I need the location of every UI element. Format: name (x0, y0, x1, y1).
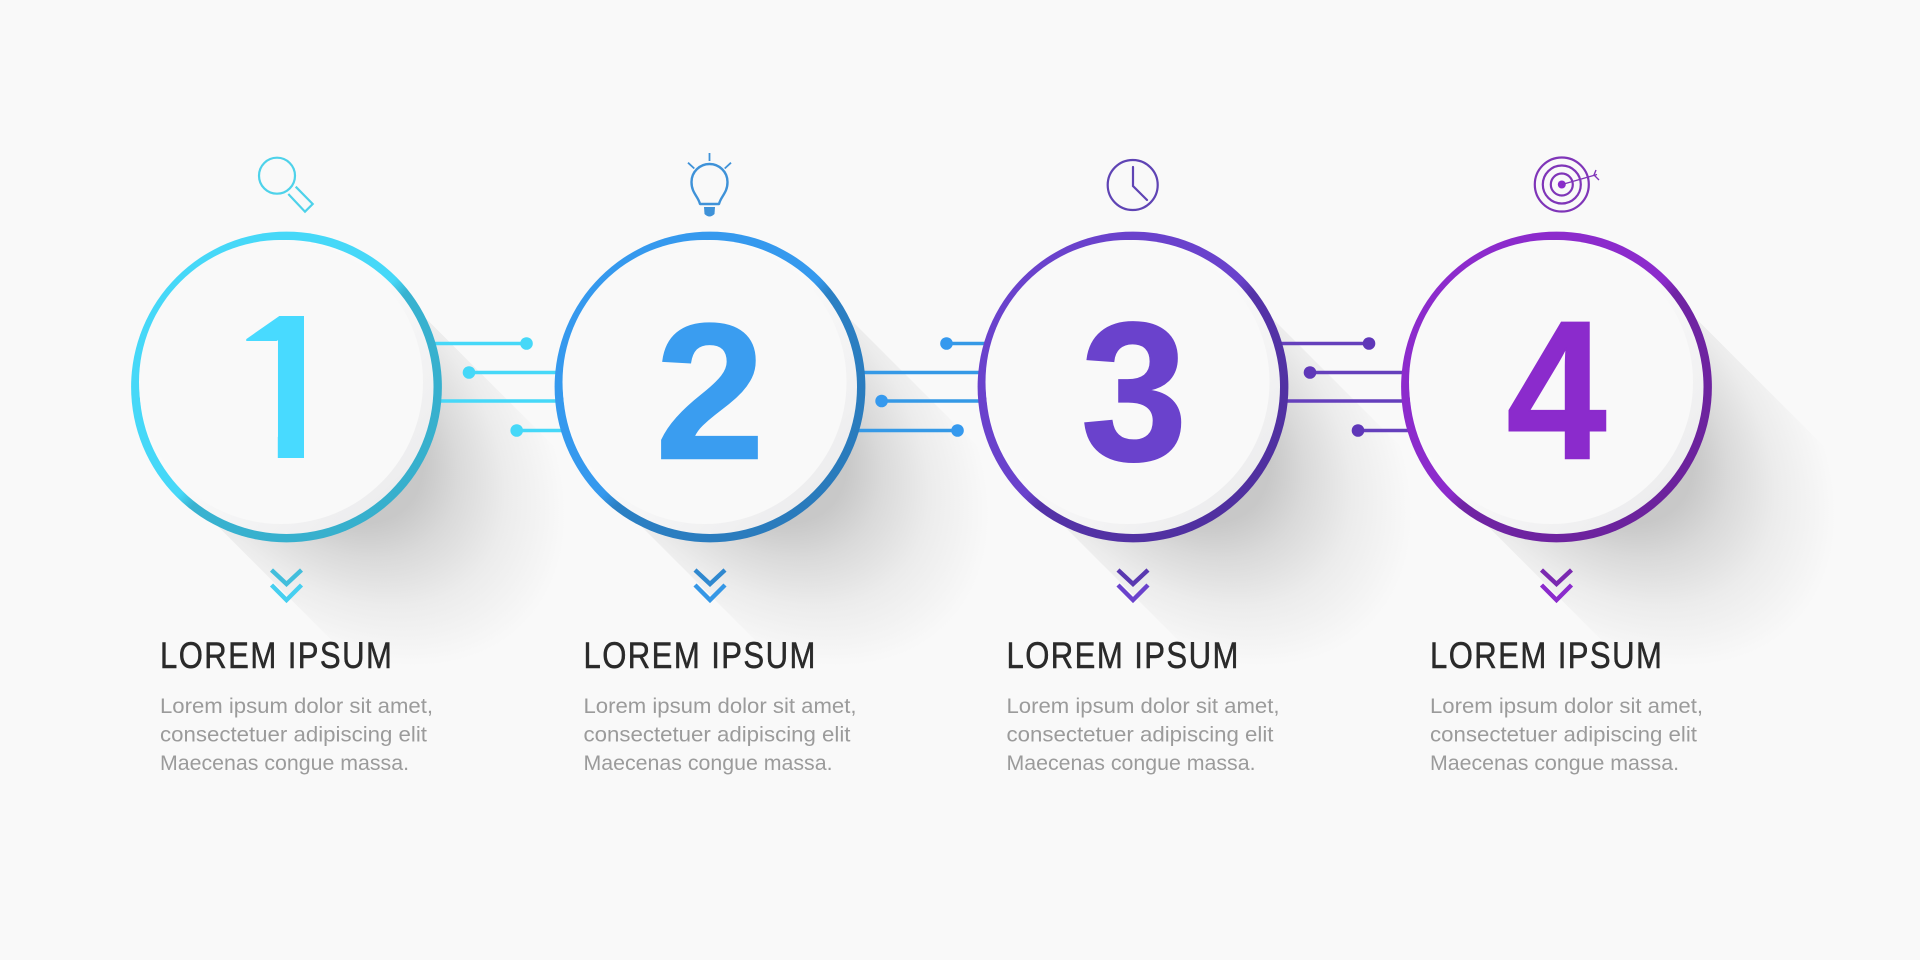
number 1: 1 (233, 273, 340, 503)
icon: magnifying glass (259, 158, 313, 212)
text block step 2: LOREM IPSUM (584, 636, 815, 677)
text block step 3: consectetuer adipiscing elit (1006, 724, 1274, 746)
step 2 circle (555, 232, 865, 542)
long shadow: circle 4 (1452, 283, 1900, 731)
text block step 1: Maecenas congue massa. (160, 752, 409, 775)
long shadow: circle 2 (606, 283, 1054, 731)
text block step 1: consectetuer adipiscing elit (160, 724, 427, 746)
step 4 circle (1401, 232, 1712, 542)
text block step 2: Lorem ipsum dolor sit amet, (584, 695, 856, 718)
step 1 circle (131, 232, 442, 542)
connector: circles 1 to 2 (420, 337, 580, 437)
number 3: 3 (1081, 282, 1187, 503)
text block step 2: Maecenas congue massa. (584, 752, 832, 775)
text block step 2: consectetuer adipiscing elit (584, 724, 851, 746)
chevrons step 1 (272, 570, 302, 600)
chevrons step 2 (695, 570, 725, 600)
text block step 1 (160, 636, 433, 775)
text block step 4: LOREM IPSUM (1430, 636, 1662, 677)
text block step 4: consectetuer adipiscing elit (1430, 724, 1697, 746)
text block step 3: LOREM IPSUM (1006, 636, 1238, 677)
text block step 4: Maecenas congue massa. (1430, 752, 1679, 775)
text block step 3 (1006, 636, 1280, 775)
long shadow: circle 1 (182, 283, 630, 731)
chevrons step 3 (1118, 570, 1148, 600)
connector: circles 3 to 4 (1270, 337, 1420, 437)
chevrons step 4 (1542, 570, 1572, 600)
icon: light bulb (688, 153, 731, 216)
step 3 circle (978, 232, 1288, 542)
text block step 3: Lorem ipsum dolor sit amet, (1006, 695, 1280, 718)
text block step 4 (1430, 636, 1703, 775)
text block step 3: Maecenas congue massa. (1006, 752, 1256, 775)
connector: circles 2 to 3 (850, 337, 1000, 437)
number 4: 4 (1506, 281, 1606, 501)
long shadow: circle 3 (1029, 283, 1477, 731)
icon: clock (1108, 160, 1158, 210)
icon: target with arrow (1535, 158, 1599, 212)
text block step 2 (584, 636, 856, 775)
text block step 4: Lorem ipsum dolor sit amet, (1430, 695, 1703, 718)
number 2: 2 (655, 283, 765, 500)
text block step 1: Lorem ipsum dolor sit amet, (160, 695, 433, 718)
text block step 1: LOREM IPSUM (160, 636, 392, 677)
